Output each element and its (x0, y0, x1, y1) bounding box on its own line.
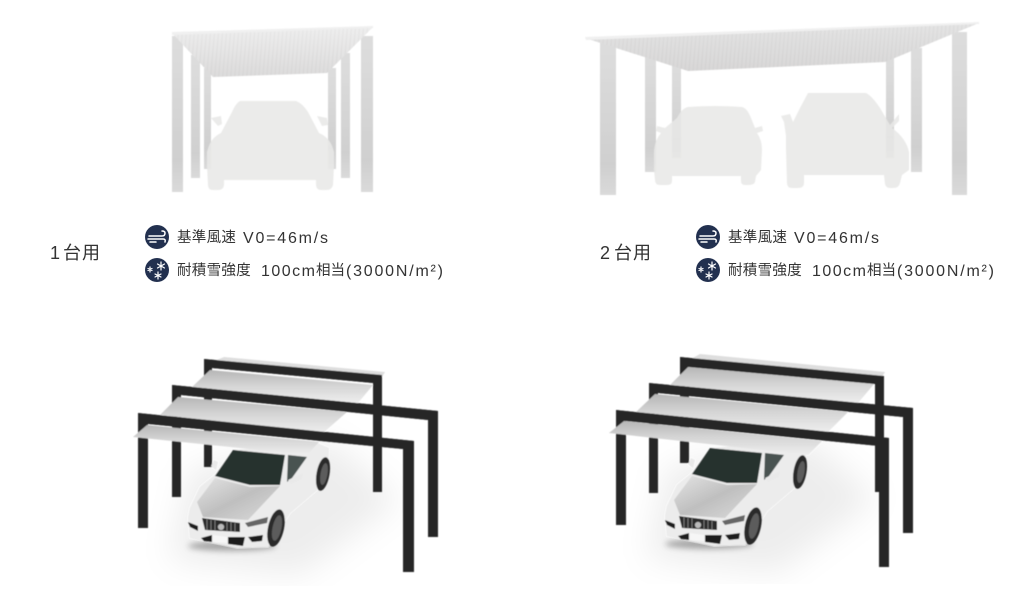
spec list: two cars (696, 225, 994, 282)
crossbeams over panels (138, 359, 438, 450)
snow strength text: (3000N/m²) (897, 263, 994, 280)
snow strength text (728, 262, 994, 280)
posts (600, 32, 967, 195)
perspective view: two-car carport (609, 354, 913, 573)
snow strength text: (3000N/m²) (346, 263, 443, 280)
snow strength text: 相当 (867, 262, 896, 279)
snow strength text: 耐積雪強度 (728, 262, 802, 279)
car (188, 443, 332, 551)
roof panels (133, 357, 385, 455)
crossbeams over panels (616, 357, 913, 447)
ground shadow (647, 438, 877, 573)
badge (694, 521, 702, 529)
label: one car: 台用 (63, 243, 101, 263)
car shadow (188, 541, 276, 551)
wind speed text: 基準風速 (728, 229, 787, 246)
number plate (690, 533, 704, 541)
wind speed text: V0=46m/s (794, 230, 879, 247)
dark frames (616, 357, 913, 567)
wind speed text: 基準風速 (177, 229, 236, 246)
front view: one-car carport (172, 26, 373, 192)
badge (217, 523, 225, 531)
front view: two-car carport (585, 22, 979, 195)
snow strength text: 100cm (261, 263, 315, 280)
roof panels (609, 354, 885, 455)
grille bars (684, 517, 712, 530)
wheels (264, 456, 332, 548)
bumper intakes (188, 522, 263, 546)
icon: snow (696, 258, 720, 282)
hood (197, 478, 280, 520)
dark frames (138, 359, 438, 572)
grille (202, 518, 240, 532)
side window (287, 455, 307, 482)
ground shadow (170, 440, 400, 575)
right car silhouette (781, 93, 909, 188)
body (665, 441, 806, 546)
label: two cars: 台用 (614, 243, 652, 263)
perspective view: one-car carport (133, 357, 438, 575)
label: two cars: 2 (600, 243, 610, 263)
wheels (741, 454, 809, 546)
car silhouette (207, 101, 334, 190)
windshield (692, 448, 762, 483)
mirrors (688, 458, 780, 482)
car shadow (665, 539, 753, 549)
side window (764, 453, 784, 480)
windshield (215, 450, 285, 485)
number plate (213, 535, 227, 543)
icon: snow (145, 258, 169, 282)
snow strength text: 相当 (316, 262, 345, 279)
mirrors (211, 460, 303, 484)
wind speed text: V0=46m/s (243, 230, 328, 247)
headlight (722, 515, 745, 525)
grille (679, 516, 717, 530)
wind speed text (177, 229, 328, 247)
wind speed text (728, 229, 879, 247)
icon: wind (145, 225, 169, 249)
car (665, 441, 809, 549)
snow strength text: 耐積雪強度 (177, 262, 251, 279)
hood (674, 476, 757, 518)
label: one car: 1 (50, 243, 60, 263)
spec list: one car (145, 225, 443, 282)
icon: wind (696, 225, 720, 249)
roof (585, 22, 979, 71)
snow strength text: 100cm (812, 263, 866, 280)
grille bars (207, 519, 235, 532)
posts (172, 36, 373, 192)
snow strength text (177, 262, 443, 280)
bumper intakes (665, 520, 740, 544)
left car silhouette (654, 106, 763, 185)
roof (172, 26, 373, 77)
headlight (245, 517, 268, 527)
body (188, 443, 329, 548)
